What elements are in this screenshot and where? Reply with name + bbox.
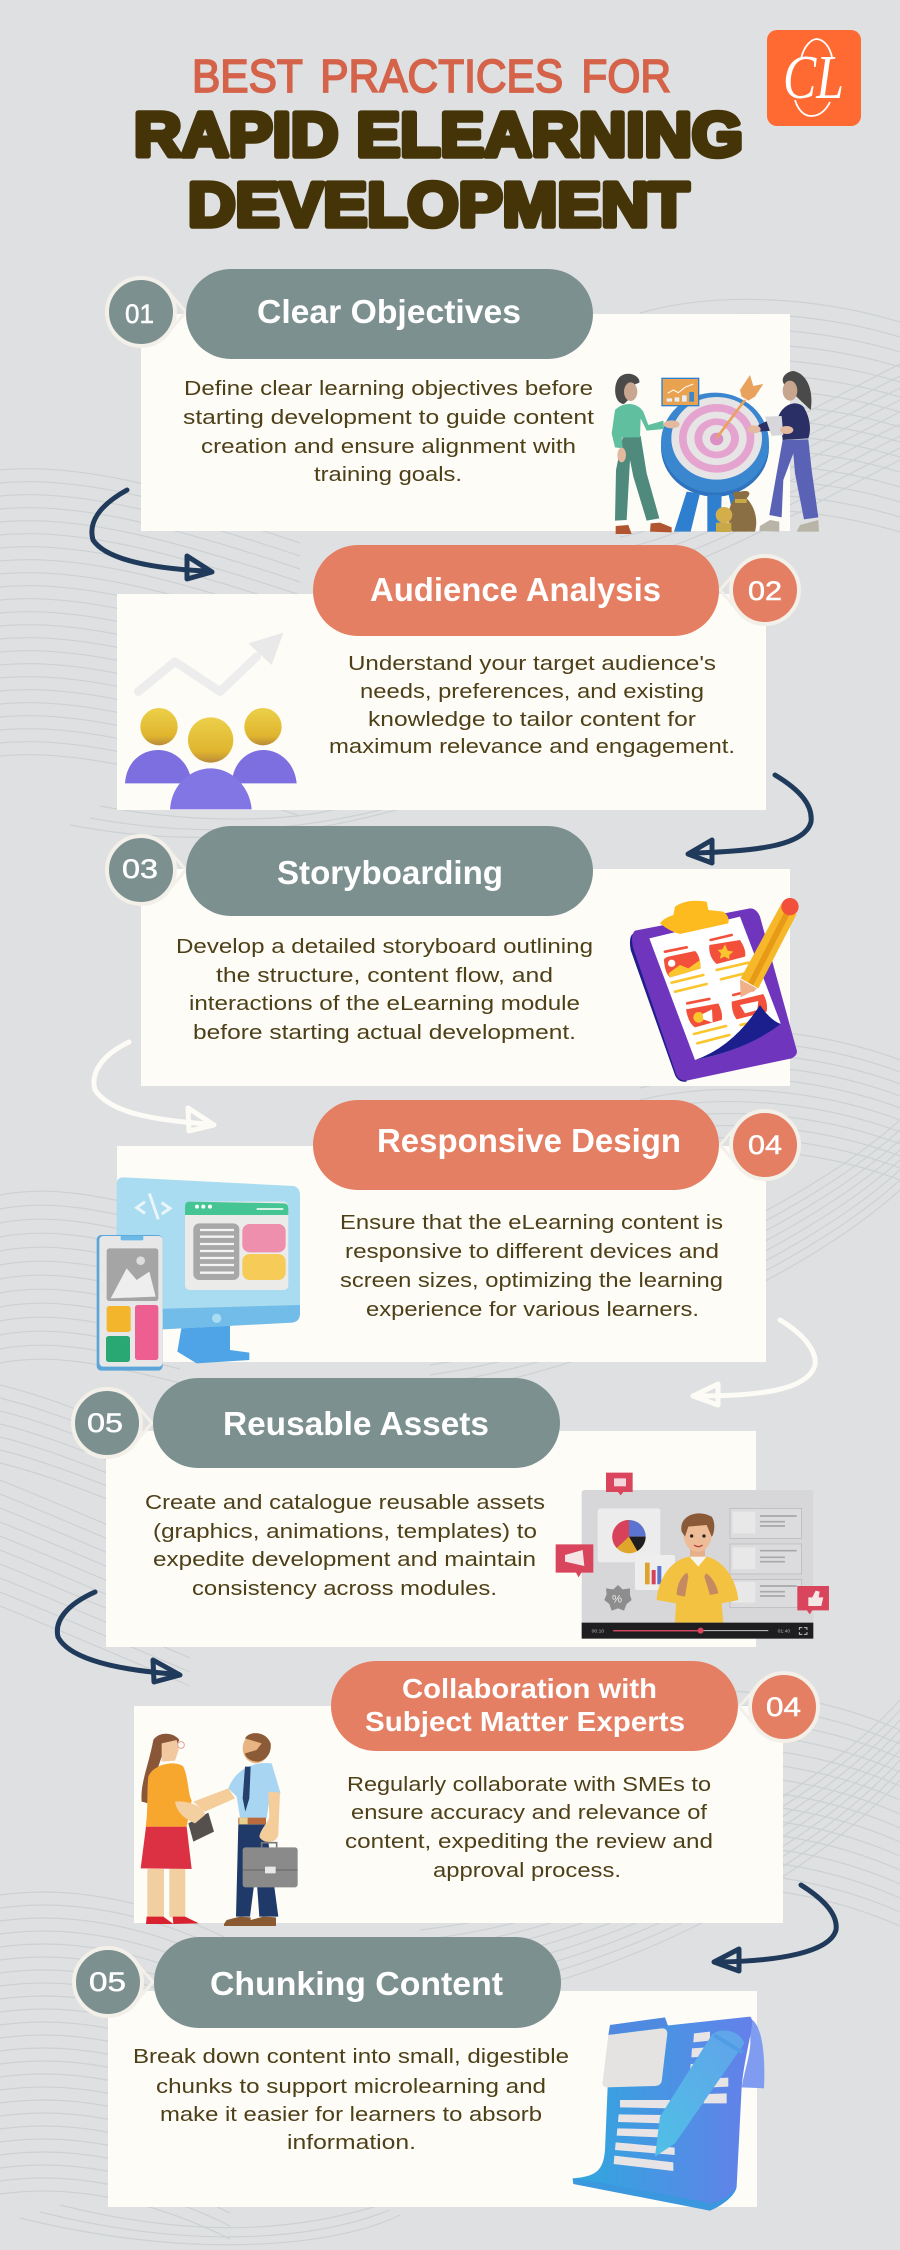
body text: Define clear learning objectives before xyxy=(184,377,593,400)
heading pill xyxy=(313,545,719,636)
number badge 02 xyxy=(720,556,799,624)
icon: document and pen xyxy=(573,2017,764,2211)
panel: collaboration with subject matter experts xyxy=(134,1661,818,1926)
body text: ensure accuracy and relevance of xyxy=(351,1801,707,1824)
body text xyxy=(183,377,594,486)
title line: best practices for: BEST PRACTICES FOR xyxy=(192,50,671,102)
body text: screen sizes, optimizing the learning xyxy=(340,1269,723,1292)
number badge 05: 05 xyxy=(89,1967,126,1997)
body text: Understand your target audience's xyxy=(348,652,716,675)
body text: needs, preferences, and existing xyxy=(360,680,704,703)
body text: Break down content into small, digestible xyxy=(133,2045,569,2068)
illustration: video presenter screen xyxy=(556,1473,829,1639)
body text: information. xyxy=(287,2131,416,2154)
panel: storyboarding xyxy=(107,826,799,1086)
logo: CL xyxy=(783,44,844,112)
panel: audience analysis xyxy=(117,545,799,810)
icon: clipboard storyboard with pencil xyxy=(630,898,799,1082)
body text xyxy=(329,652,735,758)
arrow: 03 to 04 xyxy=(94,1042,214,1131)
heading pill xyxy=(153,1378,560,1468)
arrow: 01 to 02 xyxy=(92,490,212,579)
body text: expedite development and maintain xyxy=(153,1548,536,1571)
number badge 04: 04 xyxy=(766,1692,801,1722)
number badge 01: 01 xyxy=(125,299,154,329)
number badge 04: 04 xyxy=(748,1130,782,1160)
icon: audience group with rising arrow xyxy=(125,633,297,809)
heading pill xyxy=(154,1937,561,2028)
illustration: video presenter screen: 00:10 xyxy=(592,1629,604,1635)
body text: Ensure that the eLearning content is xyxy=(340,1211,723,1234)
number badge 03: 03 xyxy=(122,854,158,884)
title line: rapid elearning: RAPID ELEARNING xyxy=(134,101,743,170)
heading pill xyxy=(186,826,593,916)
body text: interactions of the eLearning module xyxy=(189,992,580,1015)
icon: team and target xyxy=(612,371,819,534)
body text: before starting actual development. xyxy=(193,1021,576,1044)
heading pill: Responsive Design xyxy=(377,1122,681,1159)
body text: experience for various learners. xyxy=(366,1298,699,1321)
arrow: 04 to 05 xyxy=(693,1320,815,1405)
body text: make it easier for learners to absorb xyxy=(160,2103,542,2126)
heading pill xyxy=(186,269,593,359)
body text xyxy=(176,935,593,1044)
body text: responsive to different devices and xyxy=(345,1240,719,1263)
arrow: collaboration to chunking xyxy=(714,1885,836,1971)
body text: content, expediting the review and xyxy=(345,1830,713,1853)
heading pill xyxy=(331,1661,738,1751)
number badge 04 xyxy=(720,1111,799,1179)
number badge 05: 05 xyxy=(87,1408,123,1438)
body text xyxy=(345,1773,713,1882)
icon: responsive monitor and phone xyxy=(97,1177,300,1371)
body text xyxy=(133,2045,569,2154)
panel: responsive design xyxy=(97,1100,799,1371)
heading pill: Collaboration with xyxy=(402,1673,657,1704)
logo xyxy=(767,30,861,126)
panel: clear objectives xyxy=(107,269,819,534)
body text: approval process. xyxy=(433,1859,621,1882)
heading pill: Subject Matter Experts xyxy=(365,1706,685,1737)
arrow: 02 to 03 xyxy=(688,775,811,863)
heading pill: Storyboarding xyxy=(277,854,503,891)
number badge 04 xyxy=(739,1673,818,1741)
heading pill: Chunking Content xyxy=(210,1965,503,2002)
number badge 03 xyxy=(107,836,186,904)
body text: Create and catalogue reusable assets xyxy=(145,1491,545,1514)
body text: training goals. xyxy=(314,463,462,486)
title xyxy=(134,50,743,240)
arrow: 05 to collaboration xyxy=(57,1592,180,1682)
body text: Regularly collaborate with SMEs to xyxy=(347,1773,711,1796)
panel: chunking content xyxy=(74,1937,764,2211)
body text: (graphics, animations, templates) to xyxy=(153,1520,537,1543)
body text: chunks to support microlearning and xyxy=(156,2075,546,2098)
illustration: handshake xyxy=(141,1733,298,1926)
title line: development: DEVELOPMENT xyxy=(188,171,689,240)
body text: knowledge to tailor content for xyxy=(368,708,696,731)
heading pill xyxy=(313,1100,719,1190)
body text: Develop a detailed storyboard outlining xyxy=(176,935,593,958)
number badge 02: 02 xyxy=(748,576,782,606)
illustration: video presenter screen: % xyxy=(612,1593,622,1605)
body text xyxy=(340,1211,723,1321)
body text: the structure, content flow, and xyxy=(216,964,553,987)
illustration: video presenter screen: 01:40 xyxy=(778,1629,790,1635)
heading pill: Audience Analysis xyxy=(370,571,661,608)
number badge 05 xyxy=(74,1948,153,2016)
body text xyxy=(145,1491,545,1600)
body text: maximum relevance and engagement. xyxy=(329,735,735,758)
panel: reusable assets xyxy=(73,1378,829,1647)
heading pill: Reusable Assets xyxy=(223,1405,489,1442)
number badge 05 xyxy=(73,1389,152,1457)
heading pill: Clear Objectives xyxy=(257,293,521,330)
body text: starting development to guide content xyxy=(183,406,594,429)
number badge 01 xyxy=(107,278,186,346)
body text: consistency across modules. xyxy=(192,1577,497,1600)
body text: creation and ensure alignment with xyxy=(201,435,576,458)
